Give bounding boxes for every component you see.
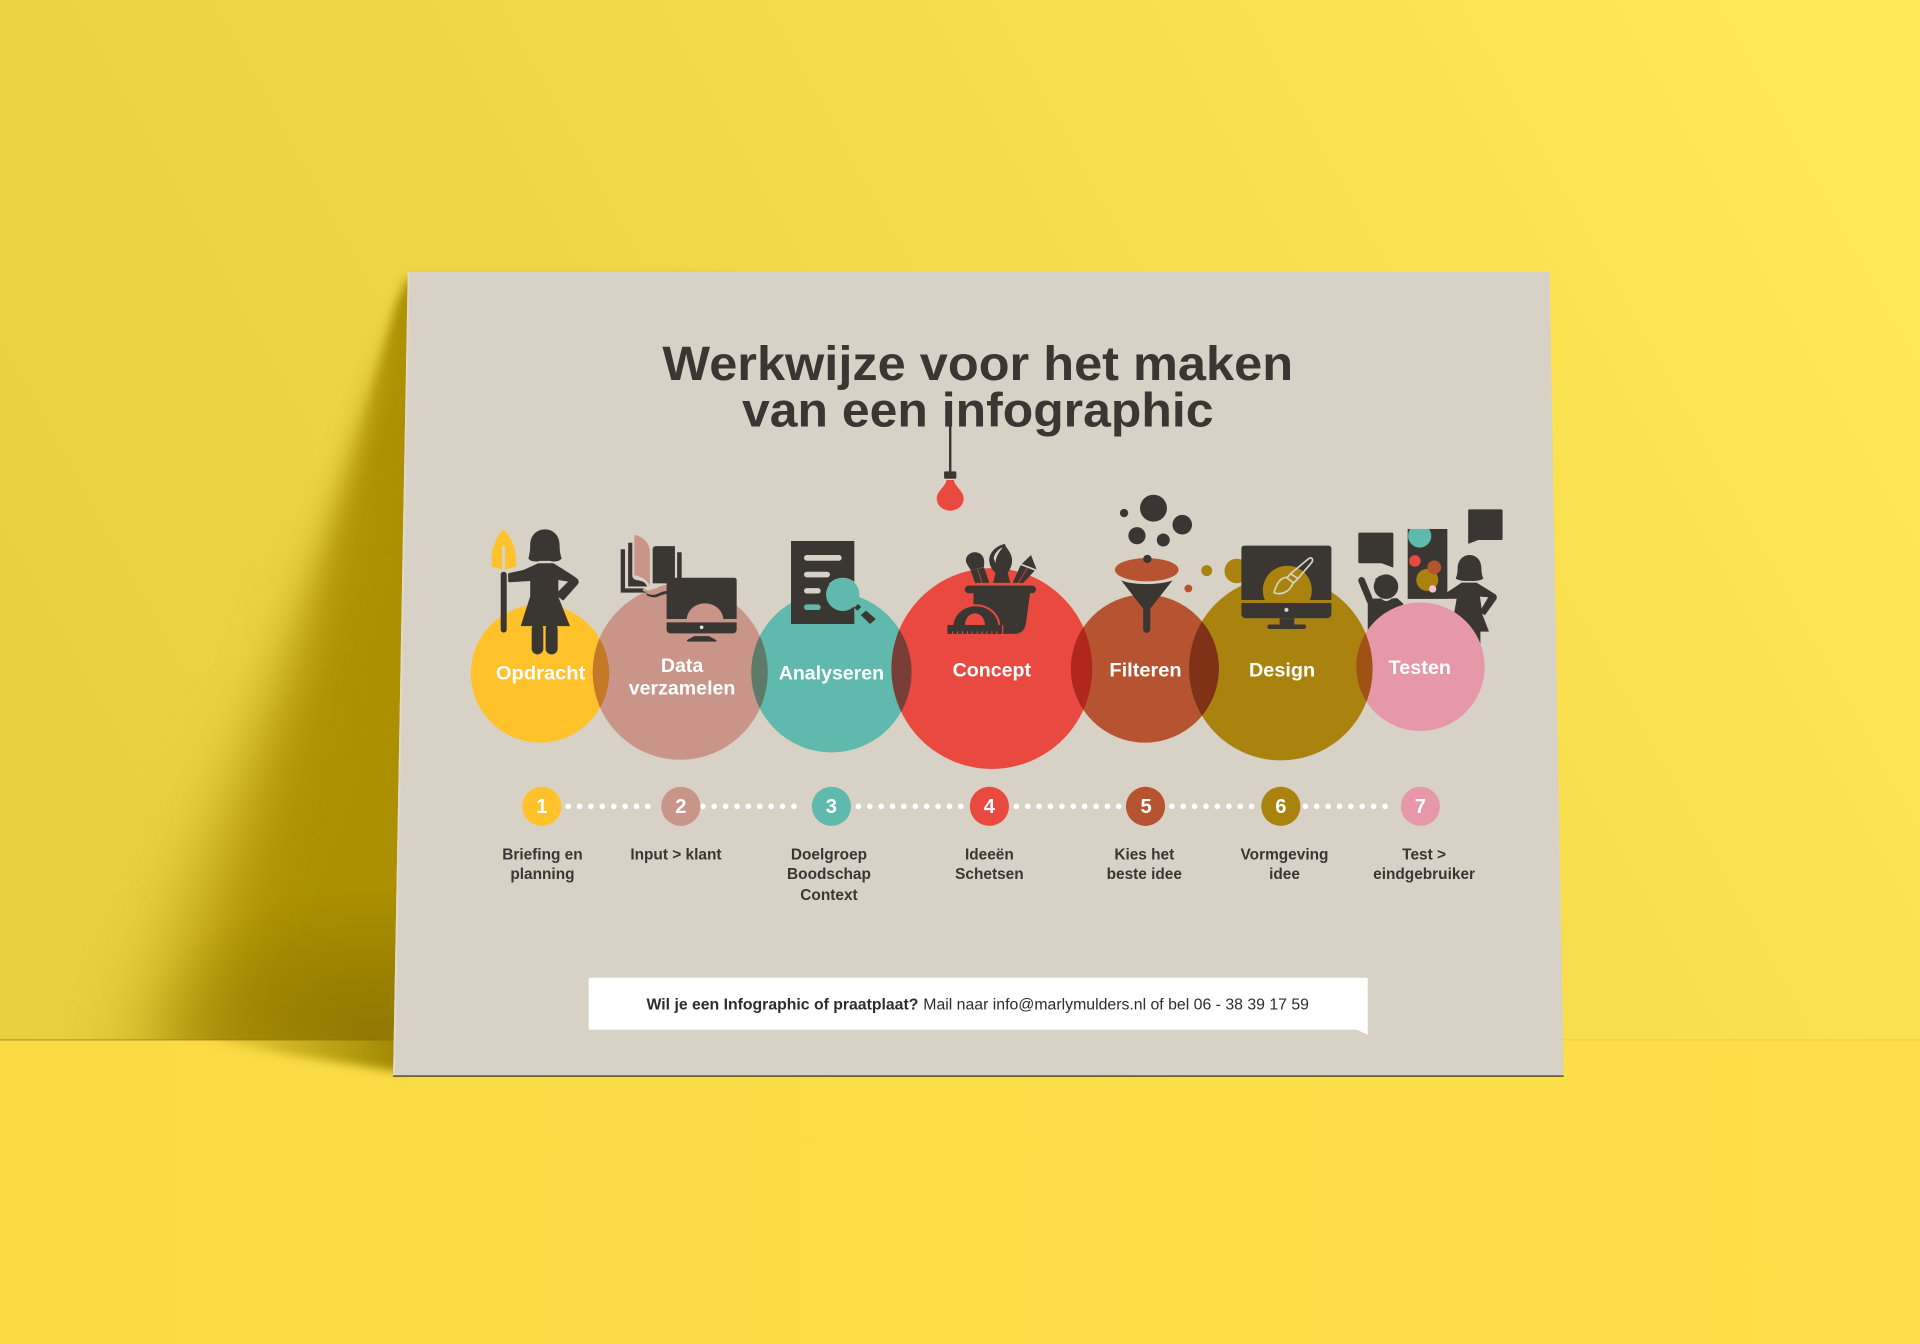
text: step 7: Test > [1402,847,1446,864]
label: Testen: Testen [1389,657,1451,679]
text: step 6: idee [1269,866,1300,883]
title: van een infographic [742,384,1213,438]
step descriptions [502,847,1475,904]
open book [621,535,682,597]
icon: monitor with paint brush [1241,546,1331,629]
board shadow on floor [218,1040,400,1078]
circle overlaps [592,622,1219,716]
marker [966,552,989,583]
step numbers: 2 [675,796,686,818]
text: step 4: Schetsen [955,866,1024,883]
circle: Design [1189,577,1373,760]
text: step 2: Input > klant [630,847,722,864]
title [662,337,1293,438]
step numbers: 4 [984,796,996,818]
text: step 1: planning [510,866,575,883]
text: step 1: Briefing en [502,847,583,864]
funnel top [1115,558,1179,581]
dotted connectors [568,804,1396,809]
text: step 4: Ideeën [965,847,1014,864]
step numbers [536,796,1426,818]
circle overlap: Design and Testen [1356,633,1373,702]
label: Concept: Concept [953,660,1031,682]
funnel body [1121,580,1173,633]
text: step 5: beste idee [1107,866,1182,883]
label: Data verzamelen: verzamelen [629,677,735,699]
panel: poster board [393,272,1564,1077]
contact text: Mail naar info@marlymulders.nl of bel 06 - 38 39 17 59 [923,997,1309,1014]
step numbers: 3 [826,796,837,818]
child with raised arm [1362,574,1403,639]
icon: book and monitor [621,535,737,642]
callout: contact box [589,978,1368,1035]
filtered dots [1184,559,1249,592]
falling dots [1120,495,1192,546]
pot [965,586,1036,634]
monitor [667,578,737,642]
chart: overlapping process circles [471,568,1373,769]
timeline: numbered steps [522,787,1440,826]
label: Filteren: Filteren [1109,660,1182,682]
circle: Filteren [1071,594,1219,743]
text: step 5: Kies het [1114,847,1174,864]
text: step 3: Boodschap [787,866,871,883]
step numbers: 5 [1141,796,1152,818]
circle: Data verzamelen [593,585,768,760]
icon: document with magnifier [791,541,876,624]
icon: hanging light bulb [937,425,964,511]
label: Opdracht: Opdracht [496,663,586,685]
label: Data verzamelen: Data [661,655,704,677]
woman presenting [1447,555,1497,649]
woman figure [508,529,579,654]
background: yellow floor [0,1040,1920,1344]
contact text: Wil je een Infographic of praatplaat? [647,997,918,1014]
protractor [947,606,1003,634]
background: yellow wall [0,0,1920,1040]
title: Werkwijze voor het maken [662,337,1293,391]
label: Design: Design [1249,660,1315,682]
step numbers: 7 [1415,796,1426,818]
speech bubble right [1468,509,1503,544]
circle labels [496,655,1451,699]
icon: people at board with speech bubbles [1358,509,1503,649]
presentation panel [1408,524,1447,599]
text: step 3: Doelgroep [791,847,867,864]
step circles [522,787,1440,826]
circle: Opdracht [471,604,609,743]
text: step 6: Vormgeving [1241,847,1328,864]
text: step 7: eindgebruiker [1373,866,1475,883]
icon: woman with shovel [492,529,579,654]
icon: funnel filtering dots [1115,495,1249,633]
contact text [647,997,1309,1014]
speech bubble left [1358,533,1393,568]
step numbers: 6 [1275,796,1286,818]
circle: Analyseren [751,592,912,752]
shovel [492,529,516,632]
text: step 3: Context [800,887,858,904]
pencil [1013,555,1037,583]
circle: Concept [891,568,1092,769]
circle: Testen [1356,602,1485,731]
step numbers: 1 [536,796,547,818]
paint brush [1274,558,1313,594]
icon: pot with brushes and protractor [947,544,1037,634]
paint brush [989,544,1012,583]
label: Analyseren: Analyseren [779,663,884,685]
board shadow on wall [105,274,408,1040]
horizon line [0,1039,1920,1041]
